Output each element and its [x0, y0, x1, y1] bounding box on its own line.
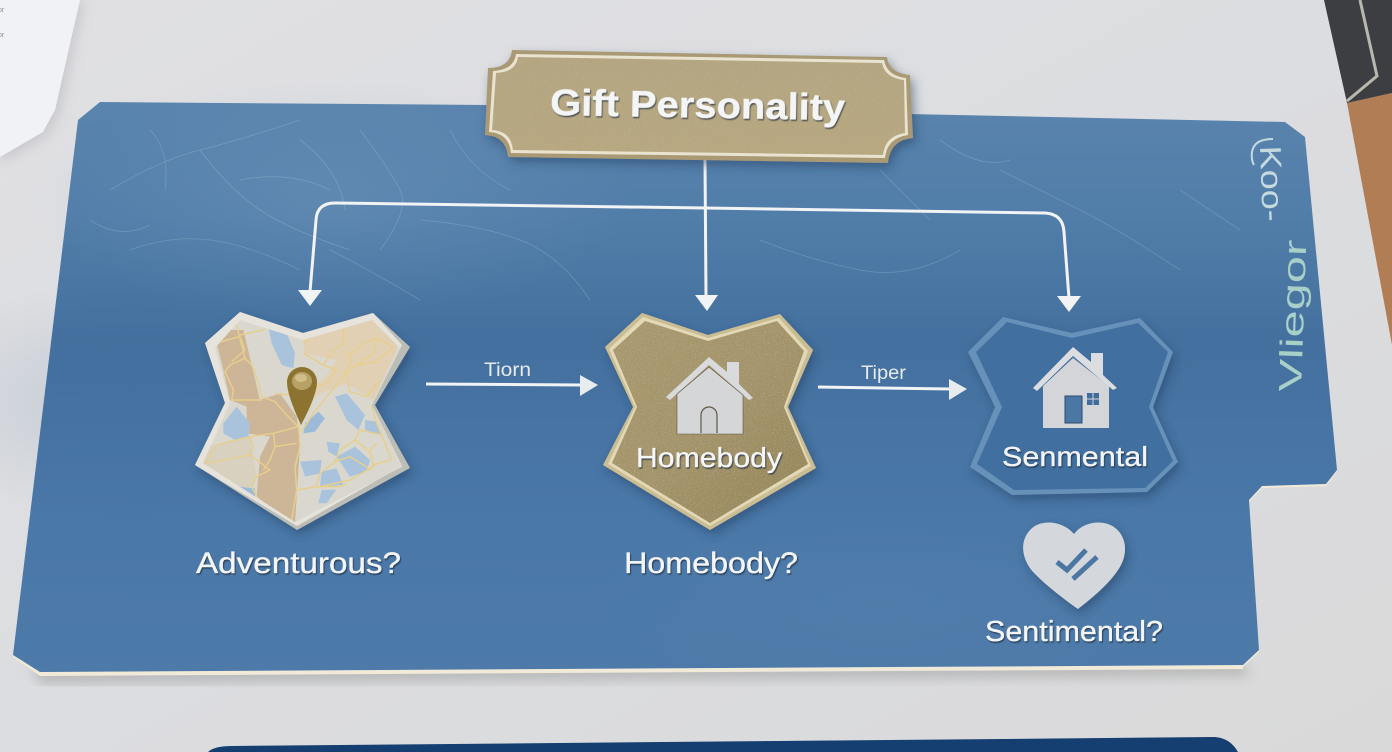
arrow: Adventurous to Homebody [426, 375, 598, 396]
dark box, top right [1324, 0, 1392, 103]
badge: Sentimental blue shield [968, 317, 1178, 495]
label: Sentimental?: Sentimental? [985, 616, 1163, 648]
label: Homebody?: Homebody? [624, 547, 798, 580]
panel: blue board [0, 80, 1337, 690]
arrow: to Adventurous [298, 203, 705, 306]
arrow: to Sentimental [705, 208, 1081, 312]
icon: heart with check [1023, 523, 1125, 609]
badge label: Homebody [636, 442, 782, 473]
dark blue board, bottom edge [208, 737, 1238, 752]
connector lines and arrows [298, 160, 1081, 400]
badge: Adventurous map shield [195, 312, 410, 530]
paper sheet, top left [0, 0, 84, 163]
arrow label: Tiorn: Tiorn [484, 360, 531, 381]
gold map cracks [205, 322, 393, 520]
icon: map pin [287, 367, 317, 425]
badge: Homebody gold shield [603, 313, 816, 530]
label: Adventurous?: Adventurous? [196, 547, 401, 580]
icon: house with window [1033, 347, 1117, 428]
board texture veins [90, 120, 1240, 300]
arrow label: Tiper: Tiper [861, 363, 907, 384]
badge label: Senmental [1002, 441, 1148, 472]
arrow: to Homebody [695, 160, 718, 311]
icon: house [666, 357, 753, 434]
map regions [200, 317, 397, 523]
vertical handwritten text, right edge: Vliegor [1272, 239, 1313, 392]
vertical handwritten mark, top: Koo- [1253, 145, 1289, 222]
wood surface, right edge [1347, 93, 1392, 345]
title text: Gift Personality [550, 82, 846, 128]
arrow: Homebody to Sentimental [818, 379, 967, 400]
title plaque [485, 50, 913, 163]
